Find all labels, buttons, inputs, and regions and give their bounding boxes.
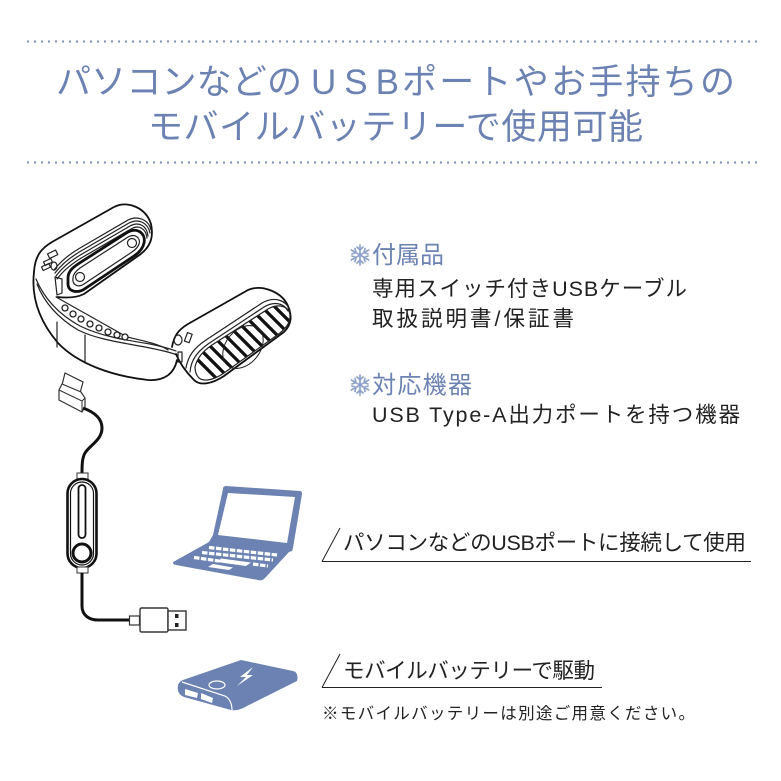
icon: laptop (173, 486, 302, 580)
compatible device text: USB Type-A出力ポートを持つ機器 (372, 403, 740, 427)
USB-A plug (130, 608, 186, 632)
illustration: neck fan (33, 204, 309, 388)
title: ポートやお手持ちの (402, 63, 735, 102)
icon: snowflake (351, 245, 369, 265)
title: USB (311, 63, 399, 102)
neck band (33, 272, 177, 380)
upper fan pod (34, 204, 152, 298)
heading: accessories: 付属品 (372, 242, 444, 269)
lower fan pod with grille (171, 287, 292, 384)
icon: mobile battery (178, 660, 298, 710)
accessories list: 専用スイッチ付きUSBケーブル (372, 277, 687, 301)
note: ※モバイルバッテリーは別途ご用意ください。 (322, 704, 695, 723)
type-C side connector (59, 373, 85, 412)
callout: PC connection (322, 528, 751, 562)
heading: compatible devices: 対応機器 (372, 372, 472, 399)
callout: PC connection: パソコンなどのUSBポートに接続して使用 (343, 531, 746, 555)
panel: compatible devices (351, 372, 740, 427)
accessories list (372, 277, 687, 331)
title: モバイルバッテリーで使用可能 (148, 108, 643, 147)
callout: mobile battery: モバイルバッテリーで駆動 (343, 659, 595, 683)
illustration: USB cable with switch (59, 373, 186, 632)
icon: snowflake (351, 375, 369, 395)
panel: accessories (351, 242, 687, 331)
inline switch (68, 473, 96, 573)
callout: mobile battery (322, 654, 602, 688)
title: パソコンなどの (56, 63, 302, 102)
accessories list: 取扱説明書/保証書 (372, 307, 574, 331)
title (56, 63, 735, 147)
